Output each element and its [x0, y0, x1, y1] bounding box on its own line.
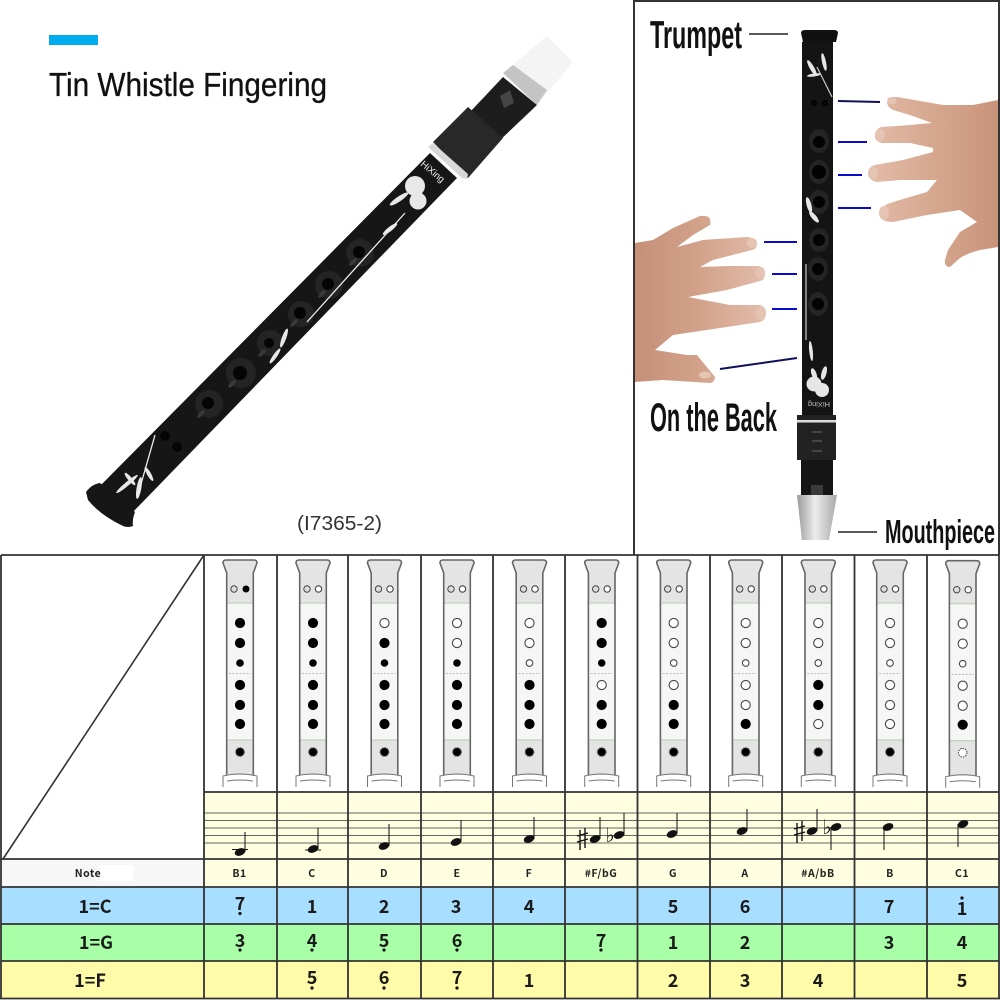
panel: whistle overview	[49, 35, 573, 535]
fingering: F	[512, 560, 546, 787]
row: 1=C: 2	[379, 893, 389, 919]
staff row background	[204, 792, 999, 887]
hand: right (top)	[868, 97, 998, 267]
diagonal tin whistle: HiXing	[418, 159, 447, 185]
row: 1=C	[1, 887, 999, 924]
note names: G	[669, 866, 677, 881]
vertical whistle: HiXing	[808, 400, 830, 409]
note names: B	[886, 866, 894, 881]
row: 1=F: 5	[957, 967, 967, 993]
fingering: C1	[946, 561, 980, 788]
row: 1=F: 6	[379, 964, 389, 990]
note names: C	[308, 866, 316, 881]
row: 1=F: 2	[668, 967, 678, 993]
panel border	[634, 1, 999, 555]
label: Trumpet: Trumpet	[650, 14, 742, 57]
fingering: D	[368, 560, 402, 787]
row: 1=G: 4	[307, 927, 318, 953]
fingering: B1	[223, 560, 257, 787]
row: 1=F: 5	[307, 964, 317, 990]
leader: trumpet	[749, 33, 788, 35]
staff notes	[232, 809, 969, 857]
row: 1=G: 1	[668, 929, 678, 955]
note names: #A/bB	[801, 866, 835, 881]
table grid	[0, 555, 1000, 999]
note names: C1	[955, 866, 969, 881]
fingering: A	[729, 560, 763, 787]
fingering: G	[657, 560, 691, 787]
note label cell: Note	[75, 866, 101, 881]
row: 1=G: 6	[452, 927, 462, 953]
row: 1=C: 4	[524, 893, 535, 919]
staff notes: ♭	[822, 815, 832, 839]
note names: E	[454, 866, 460, 881]
row: 1=C: 5	[668, 893, 678, 919]
panel: how to hold	[634, 1, 999, 555]
label: On the Back: On the Back	[650, 396, 777, 440]
row: 1=G	[1, 924, 999, 961]
row: 1=C: 1	[307, 893, 317, 919]
note names: D	[380, 866, 388, 881]
row: 1=C: 7	[235, 890, 245, 916]
fingering: C	[296, 560, 330, 787]
accent bar	[49, 35, 98, 45]
diagonal tin whistle	[86, 36, 573, 527]
fingering: #A/bB	[801, 560, 835, 787]
note names: A	[740, 866, 749, 881]
row: 1=F: 1=F	[74, 967, 106, 993]
corner diagonal	[3, 555, 204, 859]
note names: #F/bG	[585, 866, 617, 881]
panel: fingering table	[0, 555, 1000, 999]
finger guide lines	[720, 101, 880, 369]
row: 1=G: 7	[596, 927, 606, 953]
row: 1=F	[1, 961, 999, 998]
row: 1=F: 4	[813, 967, 824, 993]
row: 1=C: 1=C	[78, 893, 112, 919]
model number: (I7365-2)	[297, 513, 382, 535]
title: Tin Whistle Fingering	[49, 66, 327, 103]
leader: mouthpiece	[838, 531, 877, 533]
note names: B1	[232, 866, 247, 881]
row: 1=C: 6	[740, 893, 750, 919]
note names: F	[526, 866, 532, 881]
row: 1=G: 3	[235, 927, 245, 953]
fingering: E	[440, 560, 474, 787]
row: 1=F: 7	[452, 964, 462, 990]
row: 1=G: 1=G	[79, 929, 113, 955]
note names	[232, 866, 969, 881]
fingering: B	[873, 560, 907, 787]
row: 1=C: 3	[451, 893, 461, 919]
row: 1=G: 5	[379, 927, 389, 953]
row: 1=G: 3	[884, 929, 894, 955]
note label cell	[1, 859, 204, 887]
row: 1=G: 4	[957, 929, 968, 955]
row: 1=F: 1	[524, 967, 534, 993]
hand: left (back)	[635, 216, 766, 383]
row: 1=F: 3	[740, 967, 750, 993]
fingering: #F/bG	[585, 560, 619, 787]
row: 1=C: 7	[884, 893, 894, 919]
row: 1=G: 2	[740, 929, 750, 955]
row: 1=C: 1	[957, 895, 967, 921]
staff lines	[204, 813, 999, 843]
staff notes: ♭	[605, 823, 615, 847]
vertical whistle	[797, 30, 838, 540]
